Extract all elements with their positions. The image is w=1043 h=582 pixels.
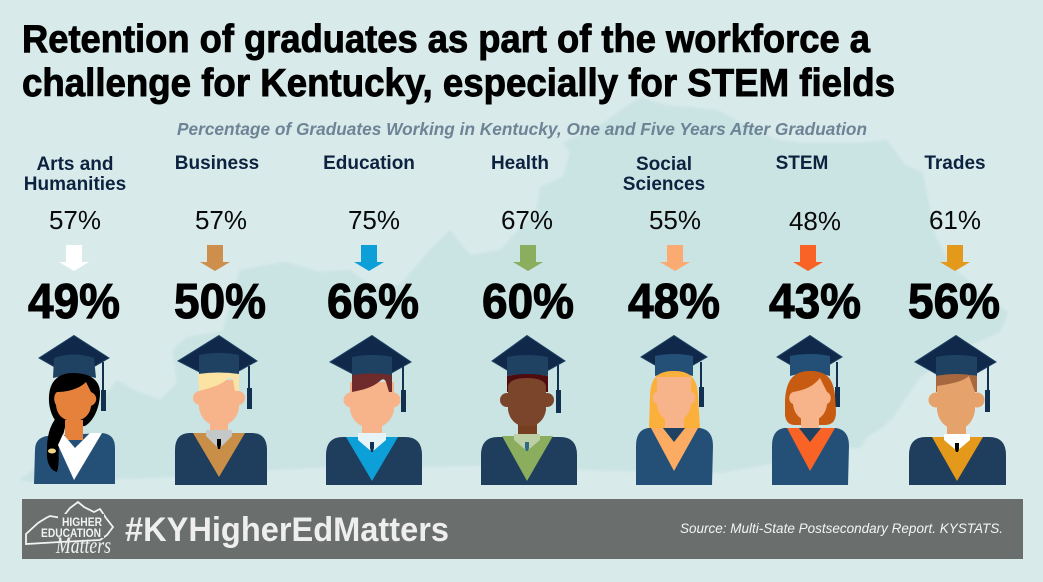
one-year value: 57% bbox=[49, 205, 101, 235]
graduate figure: business bbox=[175, 336, 267, 485]
title bbox=[22, 18, 895, 105]
hashtag: #KYHigherEdMatters bbox=[125, 511, 449, 549]
one-year value: 55% bbox=[649, 205, 701, 235]
heading: STEM: STEM bbox=[776, 153, 828, 174]
footer banner bbox=[22, 499, 1023, 559]
subtitle: Percentage of Graduates Working in Kentucky, One and Five Years After Graduation bbox=[177, 119, 867, 139]
one-year value: 67% bbox=[501, 205, 553, 235]
column: Education bbox=[323, 153, 422, 485]
graduate figure: social sciences bbox=[636, 336, 713, 485]
title: challenge for Kentucky, especially for STEM fields bbox=[22, 62, 895, 105]
logo: Higher Education Matters: HIGHER bbox=[62, 517, 103, 529]
heading: Arts and Humanities: Arts and bbox=[36, 154, 114, 175]
one-year value: 48% bbox=[789, 206, 841, 236]
one-year value: 61% bbox=[929, 205, 981, 235]
heading: Social Sciences: Social bbox=[636, 154, 692, 175]
heading: Education: Education bbox=[323, 153, 415, 174]
five-year value: 66% bbox=[327, 275, 419, 329]
arrow: amber bbox=[940, 245, 970, 271]
arrow: blue bbox=[354, 245, 384, 271]
heading: Health: Health bbox=[491, 153, 549, 174]
five-year value: 60% bbox=[482, 275, 574, 329]
graduate figure: trades bbox=[909, 336, 1006, 485]
five-year value: 43% bbox=[769, 275, 861, 329]
one-year value: 57% bbox=[195, 205, 247, 235]
column: Social Sciences bbox=[623, 154, 720, 485]
graduate figure: arts bbox=[34, 336, 115, 484]
column: STEM bbox=[769, 153, 861, 485]
heading: Business: Business bbox=[175, 153, 259, 174]
five-year value: 50% bbox=[174, 275, 266, 329]
logo: Higher Education Matters bbox=[26, 502, 113, 558]
five-year value: 56% bbox=[908, 275, 1000, 329]
arrow: orange-red bbox=[793, 245, 823, 271]
logo: Higher Education Matters: EDUCATION bbox=[41, 528, 101, 540]
column: Arts and Humanities bbox=[24, 154, 126, 484]
arrow: white bbox=[59, 245, 89, 271]
five-year value: 49% bbox=[28, 275, 120, 329]
background map: Kentucky silhouette bbox=[20, 97, 1008, 482]
heading: Trades: Trades bbox=[924, 153, 986, 174]
column: Business bbox=[174, 153, 267, 485]
arrow: peach bbox=[660, 245, 690, 271]
one-year value: 75% bbox=[348, 205, 400, 235]
column: Health bbox=[481, 153, 577, 485]
five-year value: 48% bbox=[628, 275, 720, 329]
heading: Social Sciences: Sciences bbox=[623, 174, 705, 195]
arrow: tan bbox=[200, 245, 230, 271]
source note: Source: Multi-State Postsecondary Report. KYSTATS. bbox=[680, 521, 1003, 536]
graduate figure: health bbox=[481, 336, 577, 485]
heading: Arts and Humanities: Humanities bbox=[24, 174, 126, 195]
graduate figure: STEM bbox=[772, 336, 849, 485]
logo: Higher Education Matters: Matters bbox=[55, 533, 111, 558]
graduate figure: education bbox=[326, 336, 422, 485]
arrow: green bbox=[513, 245, 543, 271]
title: Retention of graduates as part of the workforce a bbox=[22, 18, 870, 61]
column: Trades bbox=[908, 153, 1006, 485]
